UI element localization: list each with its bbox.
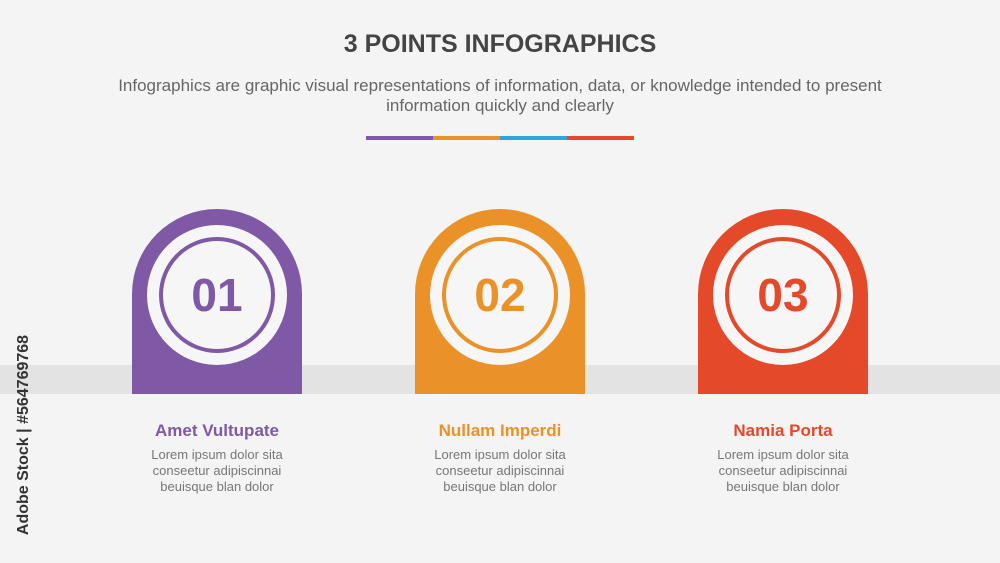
label 2 xyxy=(434,421,566,494)
watermark: Adobe Stock | #564769768 xyxy=(15,335,32,535)
label 3 xyxy=(717,421,849,494)
label 2: Lorem ipsum dolor sita xyxy=(434,447,566,462)
label 3: conseetur adipiscinnai xyxy=(719,463,847,478)
label 1 xyxy=(151,421,283,494)
card 2: 02 xyxy=(474,269,526,321)
card 3 xyxy=(698,209,868,394)
label 3: beuisque blan dolor xyxy=(726,479,840,494)
label 1: Lorem ipsum dolor sita xyxy=(151,447,283,462)
label 2: Nullam Imperdi xyxy=(439,421,561,440)
subtitle: Infographics are graphic visual representations of information, data, or knowledge intended to present information quickly and clearly xyxy=(118,76,882,115)
label 3: Lorem ipsum dolor sita xyxy=(717,447,849,462)
label 2: conseetur adipiscinnai xyxy=(436,463,564,478)
label 3: Namia Porta xyxy=(733,421,833,440)
card 1: 01 xyxy=(191,269,243,321)
card 3: 03 xyxy=(757,269,809,321)
label 1: Amet Vultupate xyxy=(155,421,279,440)
color underline xyxy=(366,136,634,140)
label 1: conseetur adipiscinnai xyxy=(153,463,281,478)
label 1: beuisque blan dolor xyxy=(160,479,274,494)
title: 3 POINTS INFOGRAPHICS xyxy=(344,30,656,58)
card 1 xyxy=(132,209,302,394)
card 2 xyxy=(415,209,585,394)
label 2: beuisque blan dolor xyxy=(443,479,557,494)
